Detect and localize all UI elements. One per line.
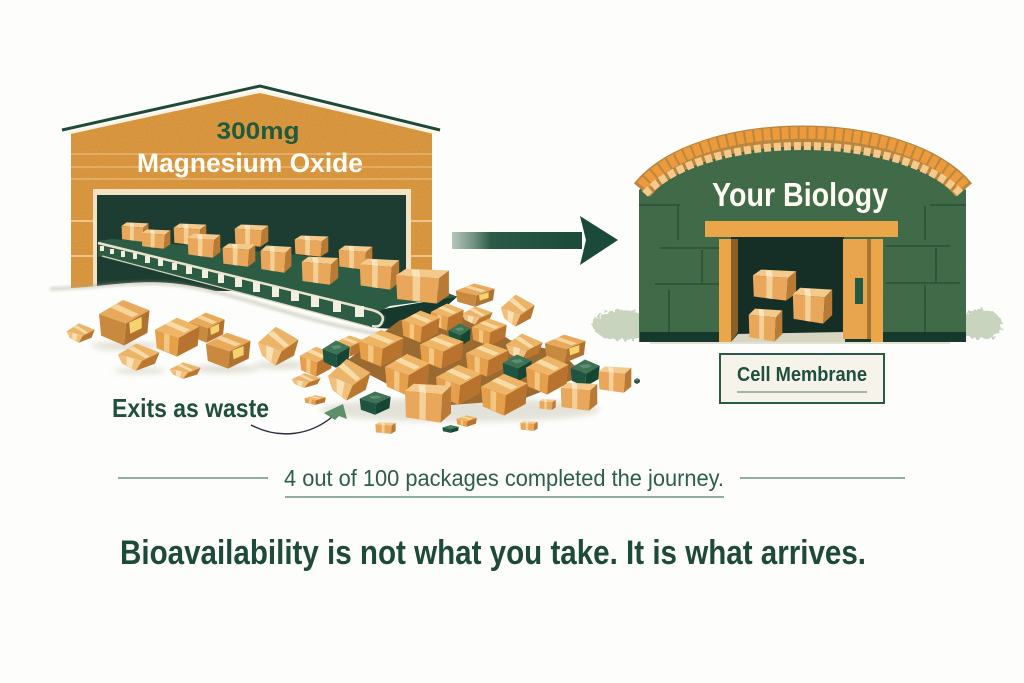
warehouse: magnesium oxide (62, 86, 440, 291)
grass patches (592, 309, 1002, 340)
label: Magnesium Oxide: Magnesium Oxide (137, 148, 363, 178)
door post left (719, 239, 731, 342)
building: your biology (592, 133, 1002, 344)
doorway (731, 237, 845, 342)
label: your biology: Your Biology (712, 176, 889, 213)
ground shadows (91, 342, 306, 374)
conveyor belt (98, 239, 458, 329)
warehouse wall (71, 93, 432, 288)
box pile (292, 283, 640, 434)
pile backing (345, 312, 585, 405)
label: cell membrane: Cell Membrane (737, 364, 867, 386)
boxes on conveyor (122, 222, 449, 304)
label: cell membrane (720, 354, 884, 403)
stat line: 4 out of 100 packages completed the journey. (284, 465, 724, 491)
sliding door (843, 239, 883, 342)
curved arrow to pile (251, 404, 347, 434)
callout: exits as waste (112, 393, 347, 434)
ground in front of warehouse (50, 282, 390, 430)
waste label: Exits as waste (112, 393, 269, 423)
brick arch (642, 133, 964, 194)
wall base (640, 332, 966, 342)
ground strip (650, 340, 950, 344)
pile shadow (320, 398, 600, 422)
boxes in doorway (749, 270, 832, 342)
label: 300mg: 300mg (216, 118, 300, 145)
door opening (93, 189, 411, 291)
warehouse roof (62, 86, 440, 133)
headline: Bioavailability is not what you take. It is what arrives. (120, 534, 866, 572)
door lintel (705, 221, 898, 237)
arrow to biology (452, 216, 618, 265)
belt rollers (100, 246, 364, 317)
belt surface (98, 239, 458, 312)
belt underside (376, 296, 458, 329)
left scattered boxes (67, 300, 306, 379)
biology wall (639, 145, 966, 342)
